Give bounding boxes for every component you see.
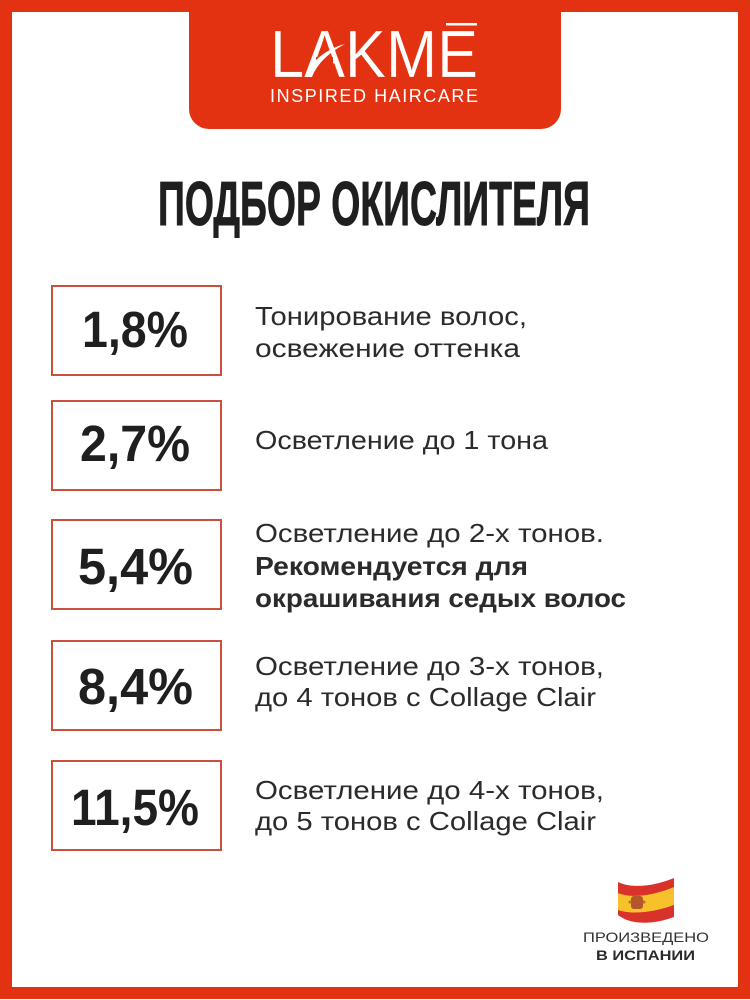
description 1,8% [255, 301, 527, 363]
percent box 1,8%: 1,8% [82, 301, 188, 358]
percent box 8,4%: 8,4% [78, 658, 193, 715]
made in Spain label: ПРОИЗВЕДЕНО [583, 929, 709, 945]
percent box 5,4%: 5,4% [78, 538, 193, 595]
description 5,4%: Рекомендуется для [255, 551, 528, 581]
description 11,5%: до 5 тонов с Collage Clair [255, 806, 596, 836]
percent box 11,5% [52, 761, 221, 850]
description 11,5% [255, 775, 604, 836]
logo tagline: INSPIRED HAIRCARE [270, 86, 478, 106]
description 11,5%: Осветление до 4-х тонов, [255, 775, 604, 805]
made in Spain label: В ИСПАНИИ [596, 947, 695, 963]
row: 1,8% [52, 286, 527, 375]
description 5,4% [255, 518, 626, 613]
row: 2,7% [52, 401, 549, 490]
description 1,8%: освежение оттенка [255, 333, 521, 363]
percent box 5,4% [52, 520, 221, 609]
logo tab [189, 0, 561, 129]
description 8,4%: до 4 тонов с Collage Clair [255, 682, 596, 712]
row: 8,4% [52, 641, 604, 730]
description 8,4%: Осветление до 3-х тонов, [255, 651, 604, 681]
description 5,4%: окрашивания седых волос [255, 583, 626, 613]
icon: Spain flag [618, 878, 674, 923]
row: 5,4% [52, 518, 626, 613]
percent box 1,8% [52, 286, 221, 375]
percent box 11,5%: 11,5% [71, 779, 199, 836]
description 5,4%: Осветление до 2-х тонов. [255, 518, 604, 548]
logo wordmark: LAKME [270, 17, 478, 92]
percent box 2,7% [52, 401, 221, 490]
row: 11,5% [52, 761, 604, 850]
description 2,7%: Осветление до 1 тона [255, 425, 549, 455]
made in Spain label [583, 929, 709, 963]
description 1,8%: Тонирование волос, [255, 301, 527, 331]
percent box 8,4% [52, 641, 221, 730]
percent box 2,7%: 2,7% [80, 415, 190, 472]
description 8,4% [255, 651, 604, 712]
